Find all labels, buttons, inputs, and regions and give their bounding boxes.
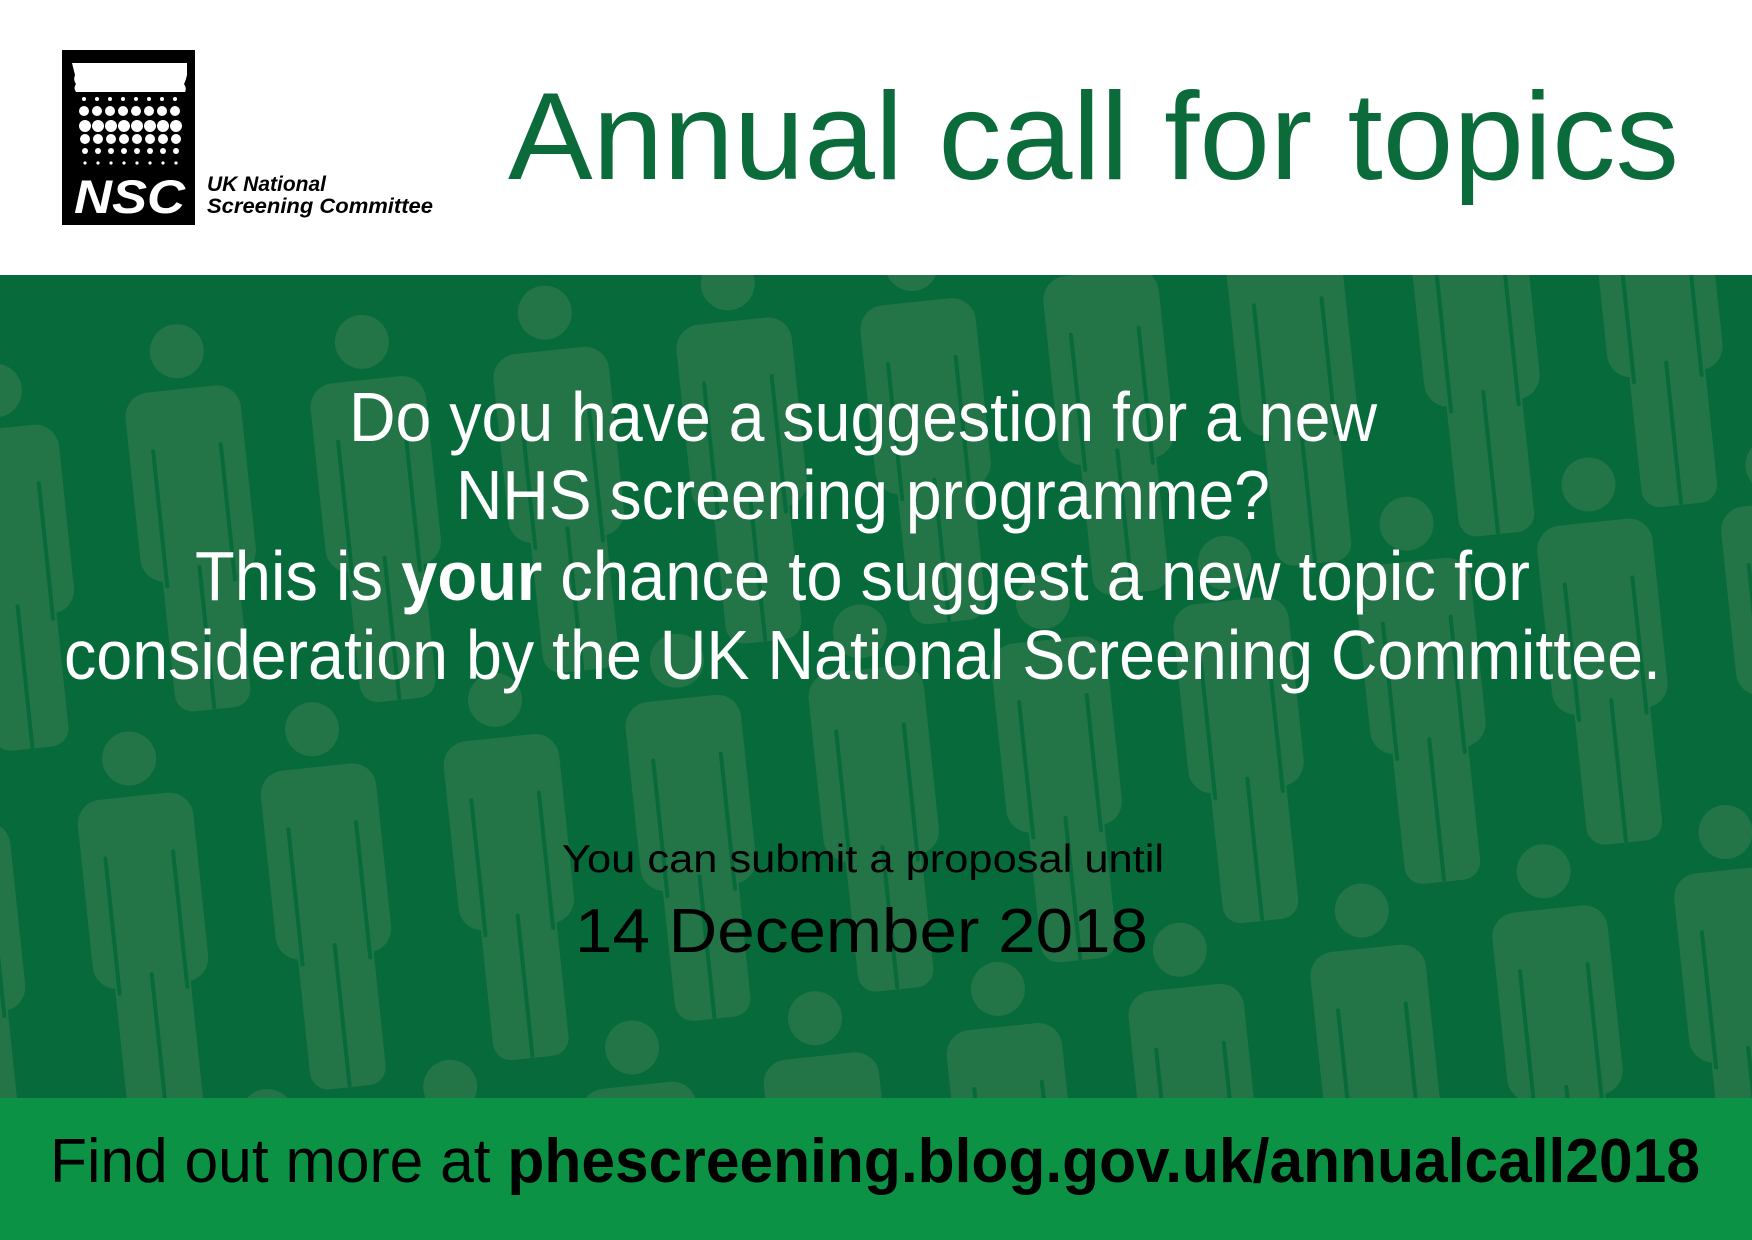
text block: question: This is your chance to suggest a new topic for	[195, 537, 1530, 615]
text: submission deadline	[562, 838, 1164, 966]
panel: green main background	[0, 275, 1752, 1098]
background pattern: people figures	[0, 275, 1752, 1098]
header background	[0, 0, 1752, 275]
text block: question: Do you have a suggestion for a new	[349, 378, 1377, 456]
logo wordmark	[207, 173, 433, 218]
text: submission deadline: You can submit a proposal until	[562, 838, 1164, 881]
title: Annual call for topics	[508, 68, 1679, 206]
logo: NSC	[62, 50, 195, 225]
logo wordmark: UK National	[207, 173, 327, 196]
logo wordmark: Screening Committee	[207, 195, 433, 218]
text block: question: NHS screening programme?	[456, 456, 1270, 534]
footer bar	[0, 1098, 1752, 1240]
text: submission deadline: 14 December 2018	[575, 897, 1148, 966]
logo: NSC: NSC	[74, 170, 186, 223]
text block: question	[64, 378, 1661, 694]
text block: question: consideration by the UK National Screening Committee.	[64, 616, 1661, 694]
footer link text: Find out more at phescreening.blog.gov.uk/annualcall2018	[50, 1127, 1700, 1196]
